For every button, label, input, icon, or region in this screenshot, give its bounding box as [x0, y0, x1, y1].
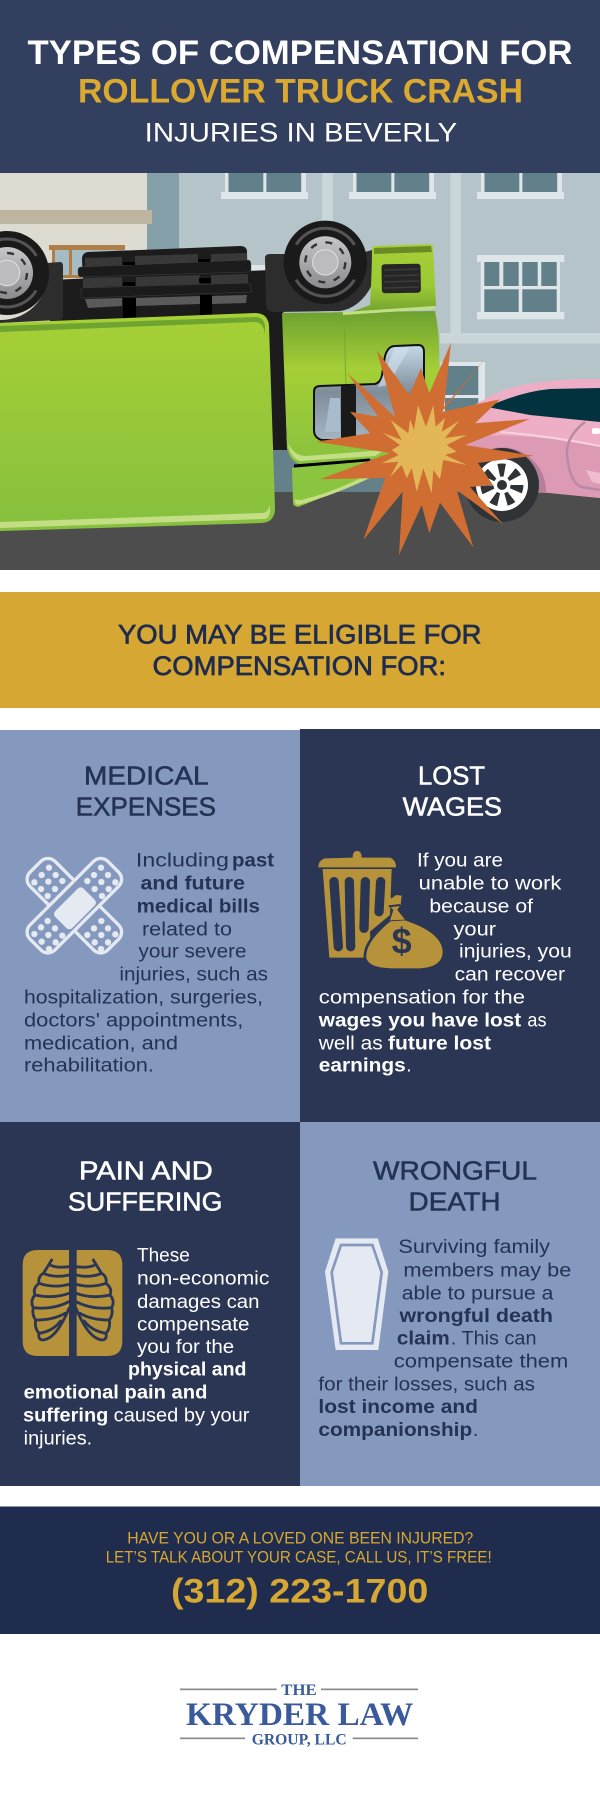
body text: pain and suffering: suffering — [23, 1406, 108, 1427]
body text: medical expenses: hospitalization, surgeries, — [24, 987, 263, 1008]
body text: wrongful death: companionship — [318, 1420, 472, 1441]
body text: wrongful death: lost income and — [318, 1397, 478, 1418]
body text: wrongful death: . — [473, 1420, 478, 1441]
buildings background — [0, 173, 600, 493]
body text: pain and suffering: damages can — [137, 1292, 260, 1313]
truck fuel tanks — [78, 246, 252, 318]
gold eligibility banner — [0, 592, 600, 708]
heading: pain and suffering: SUFFERING — [68, 1187, 222, 1217]
body text: wrongful death: . This can — [451, 1329, 536, 1350]
body text: medical expenses: injuries, such as — [119, 965, 268, 986]
truck chassis — [0, 250, 372, 450]
body text: lost wages: wages you have lost — [318, 1010, 522, 1031]
heading: pain and suffering: PAIN AND — [79, 1155, 213, 1185]
body text: pain and suffering: caused by your — [114, 1406, 250, 1427]
truck wheel left — [0, 231, 49, 315]
phone number: (312) 223-1700 — [171, 1573, 428, 1611]
body text: medical expenses: your severe — [138, 942, 246, 963]
logo: The Kryder Law Group: GROUP, LLC — [252, 1731, 347, 1748]
body text: pain and suffering: non-economic — [137, 1269, 269, 1290]
body text: pain and suffering: emotional pain and — [24, 1382, 207, 1403]
body text: pain and suffering: injuries. — [24, 1429, 92, 1450]
icon: coffin — [325, 1238, 388, 1350]
logo: The Kryder Law Group: KRYDER LAW — [186, 1697, 413, 1733]
body text: lost wages: If you are — [417, 850, 503, 871]
explosion burst — [316, 343, 533, 555]
car wheel — [465, 448, 539, 522]
body text: pain and suffering: you for the — [137, 1337, 234, 1358]
body text: lost wages: can recover — [455, 965, 566, 986]
body text: lost wages: as — [527, 1010, 546, 1031]
body text: wrongful death: Surviving family — [398, 1237, 551, 1258]
panel: lost wages — [300, 729, 600, 1122]
panel: medical expenses — [0, 730, 300, 1122]
heading: lost wages: WAGES — [403, 792, 502, 822]
body text: medical expenses: Including — [136, 850, 229, 871]
heading: lost wages — [403, 760, 502, 822]
pink car — [455, 379, 600, 522]
body text: medical expenses: doctors' appointments, — [24, 1010, 243, 1031]
call to action band: LET’S TALK ABOUT YOUR CASE, CALL US, IT’S FREE! — [106, 1548, 492, 1566]
heading: medical expenses — [76, 760, 216, 822]
body text: lost wages: injuries, you — [459, 942, 572, 963]
body text: lost wages: well as — [318, 1033, 383, 1054]
heading: wrongful death: DEATH — [409, 1187, 501, 1217]
body text: lost wages: earnings — [319, 1055, 406, 1076]
panel: wrongful death — [300, 1122, 600, 1486]
heading: medical expenses: EXPENSES — [76, 792, 216, 822]
logo: The Kryder Law Group — [180, 1682, 418, 1748]
body text: wrongful death: claim — [397, 1329, 450, 1350]
body text: lost wages — [318, 850, 572, 1076]
truck cab upper body — [343, 244, 436, 315]
call to action band — [0, 1506, 600, 1634]
body text: wrongful death: members may be — [403, 1260, 571, 1281]
body text: medical expenses: past — [232, 850, 275, 871]
panel: pain and suffering — [0, 1122, 300, 1486]
body text: wrongful death: compensate them — [394, 1352, 568, 1373]
truck bumper — [292, 461, 380, 507]
body text: medical expenses: medication, and — [24, 1033, 178, 1054]
crash illustration — [0, 173, 600, 570]
body text: pain and suffering: physical and — [128, 1359, 246, 1380]
body text: lost wages: . — [406, 1055, 412, 1076]
truck cab windows — [314, 345, 424, 440]
body text: wrongful death — [318, 1237, 571, 1441]
body text: medical expenses — [24, 850, 275, 1076]
truck trailer — [0, 313, 275, 531]
body text: wrongful death: able to pursue a — [402, 1283, 554, 1304]
icon: trash can and money bag — [318, 851, 444, 970]
header panel — [0, 0, 600, 173]
body text: lost wages: compensation for the — [319, 987, 525, 1008]
body text: medical expenses: and future — [140, 873, 245, 894]
body text: lost wages: unable to work — [419, 873, 562, 894]
body text: medical expenses: medical bills — [137, 896, 260, 917]
body text: wrongful death: wrongful death — [398, 1306, 553, 1327]
body text: pain and suffering: compensate — [137, 1315, 250, 1336]
body text: pain and suffering — [23, 1245, 269, 1450]
icon: trash can and money bag: $ — [392, 921, 412, 962]
heading: pain and suffering — [68, 1155, 222, 1217]
body text: lost wages: because of — [429, 896, 534, 917]
title line 2: ROLLOVER TRUCK CRASH — [78, 72, 523, 110]
truck wheel right — [284, 221, 367, 304]
body text: wrongful death: for their losses, such as — [318, 1374, 535, 1395]
heading: wrongful death — [373, 1155, 537, 1217]
road — [0, 492, 600, 570]
title line 1: TYPES OF COMPENSATION FOR — [28, 34, 572, 72]
body text: pain and suffering: These — [137, 1245, 190, 1266]
body text: lost wages: future lost — [388, 1033, 492, 1054]
icon: rib cage — [23, 1250, 122, 1356]
title line 3: INJURIES IN BEVERLY — [145, 118, 457, 148]
gold eligibility banner: COMPENSATION FOR: — [152, 651, 446, 681]
truck cab lower body — [282, 311, 440, 466]
heading: wrongful death: WRONGFUL — [373, 1155, 537, 1185]
icon: bandage — [23, 854, 126, 957]
gold eligibility banner: YOU MAY BE ELIGIBLE FOR — [118, 619, 482, 649]
logo: The Kryder Law Group: THE — [281, 1682, 317, 1699]
body text: medical expenses: rehabilitation. — [24, 1055, 154, 1076]
body text: medical expenses: related to — [142, 920, 232, 941]
body text: lost wages: your — [454, 920, 497, 941]
call to action band: HAVE YOU OR A LOVED ONE BEEN INJURED? — [127, 1529, 473, 1547]
heading: lost wages: LOST — [418, 760, 485, 790]
heading: medical expenses: MEDICAL — [84, 760, 209, 790]
